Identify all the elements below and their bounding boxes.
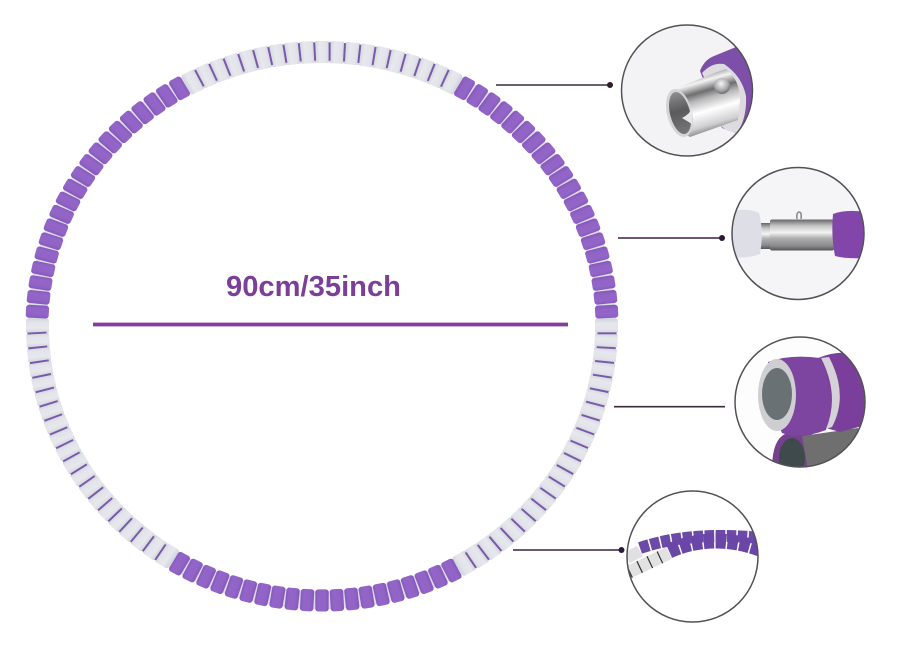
- hoop segment: white top arc: [181, 41, 463, 95]
- lower tube opening: [779, 438, 805, 466]
- hoop segment: purple upper-left arc: [26, 75, 191, 319]
- spring pin: [797, 212, 801, 219]
- detail circle 3: foam tube cross-section: [735, 337, 868, 478]
- lower tube purple rim: [772, 434, 812, 466]
- rear purple sleeve: [818, 353, 868, 432]
- white seam: [821, 357, 840, 429]
- callout line 1: [496, 82, 613, 88]
- hoop segment: white right-lower arc: [452, 318, 618, 577]
- tube opening: [666, 89, 693, 137]
- detail circle 4: close-up of two hoop sections: [627, 491, 760, 622]
- callout line 4: [513, 547, 624, 553]
- interior slot: [682, 108, 692, 124]
- hoop segment: purple upper-right arc: [453, 75, 618, 319]
- purple foam sleeve: [700, 47, 756, 134]
- foam inner lining: [702, 64, 746, 133]
- diameter label: 90cm/35inch: [226, 271, 401, 303]
- front row purple beads: [669, 541, 760, 551]
- hoop: [26, 41, 618, 612]
- back row purple beads: [640, 536, 760, 548]
- back row white beads: [627, 551, 640, 558]
- front row stripes: [629, 553, 669, 572]
- white foam end: [730, 210, 762, 258]
- diameter line: [93, 323, 568, 326]
- tube interior: [669, 92, 691, 134]
- thin tube: [760, 223, 770, 249]
- callout line 2: [618, 235, 725, 241]
- detail circle 2: joined metal connector: [730, 168, 866, 300]
- metal tube: [672, 69, 740, 137]
- front purple sleeve: [768, 357, 831, 436]
- purple foam end: [832, 211, 866, 258]
- hoop segment: white left-lower arc: [26, 318, 180, 569]
- grey rim: [758, 359, 796, 431]
- lower tube grey body: [802, 428, 858, 466]
- detail circle 1: open metal connector end: [622, 25, 756, 156]
- dark interior: [762, 368, 792, 420]
- callout line 3: [614, 406, 725, 408]
- hoop segment: purple bottom arc: [168, 551, 463, 612]
- thick tube: [770, 220, 834, 250]
- front row white beads: [629, 553, 669, 572]
- spring pin: [714, 78, 730, 94]
